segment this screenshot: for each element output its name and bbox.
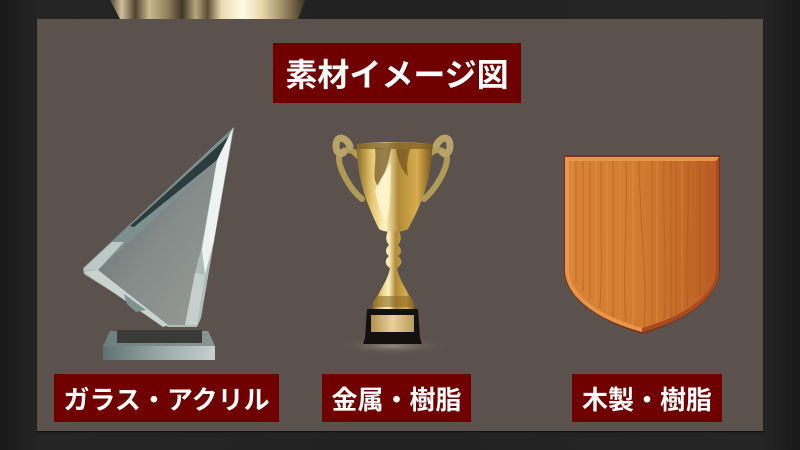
title: 素材イメージ図: [285, 57, 509, 93]
handles: [336, 138, 450, 199]
cup bowl: [357, 142, 432, 232]
glass blade: [83, 127, 234, 327]
black plinth: [363, 309, 422, 344]
stem: [373, 231, 414, 309]
label: glass and acrylic: [54, 374, 279, 422]
glass base: [103, 330, 215, 360]
name plate: [371, 315, 414, 332]
label: glass and acrylic: ガラス・アクリル: [63, 384, 270, 414]
label: metal and resin: 金属・樹脂: [331, 384, 462, 414]
title: [273, 43, 521, 103]
label: wood and resin: 木製・樹脂: [582, 384, 712, 414]
label: wood and resin: [572, 374, 722, 422]
background trophy cup peeking above panel: [110, 0, 305, 19]
label: metal and resin: [322, 374, 471, 422]
